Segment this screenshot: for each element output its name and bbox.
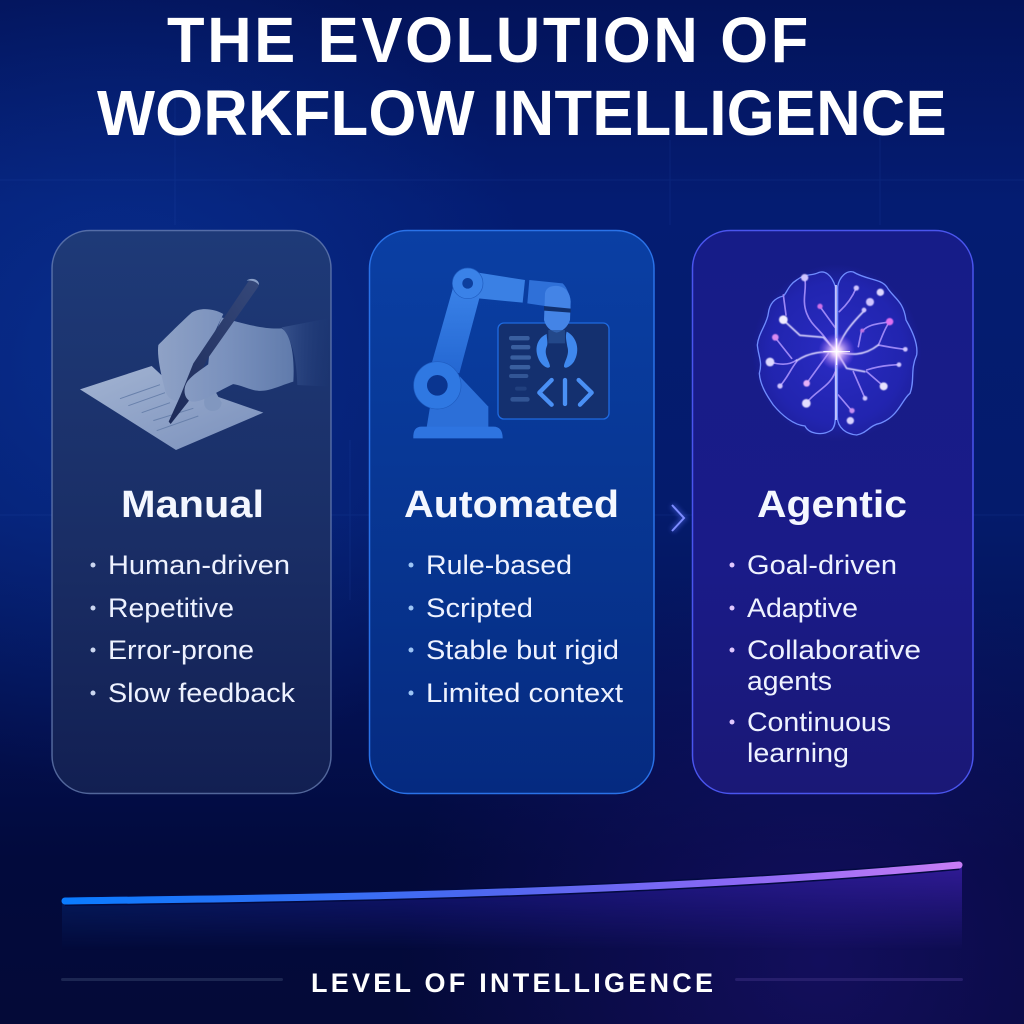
list: agentic bullets: Goal-driven xyxy=(747,550,897,580)
title: THE EVOLUTION OF xyxy=(167,5,808,76)
panel: manual xyxy=(52,230,331,794)
icon: hand writing on paper xyxy=(80,279,328,450)
panel: automated xyxy=(370,230,654,794)
list: agentic bullets: Adaptive xyxy=(747,593,858,623)
title xyxy=(97,5,947,149)
title: WORKFLOW INTELLIGENCE xyxy=(97,78,947,149)
list: agentic bullets: Collaborative xyxy=(747,635,921,665)
list: automated bullets: Limited context xyxy=(426,678,624,708)
list: agentic bullets: Continuous xyxy=(747,707,891,737)
list: manual bullets: Slow feedback xyxy=(108,678,296,708)
heading: Automated: Automated xyxy=(404,484,619,526)
list: manual bullets xyxy=(90,550,296,708)
axis label: level of intelligence xyxy=(61,968,963,998)
list: automated bullets xyxy=(408,550,624,708)
list: manual bullets: Repetitive xyxy=(108,593,234,623)
list: agentic bullets xyxy=(730,550,921,768)
arrow: automated to agentic xyxy=(672,505,684,531)
panel: agentic xyxy=(692,230,973,794)
list: agentic bullets: learning xyxy=(747,738,849,768)
list: automated bullets: Stable but rigid xyxy=(426,635,619,665)
list: manual bullets: Human-driven xyxy=(108,550,290,580)
heading: Manual: Manual xyxy=(121,484,264,526)
heading: Agentic: Agentic xyxy=(757,484,907,526)
list: agentic bullets: agents xyxy=(747,666,832,696)
icon: glowing brain xyxy=(752,264,922,441)
list: manual bullets: Error-prone xyxy=(108,635,254,665)
list: automated bullets: Scripted xyxy=(426,593,533,623)
list: automated bullets: Rule-based xyxy=(426,550,572,580)
icon: robot arm with code screen xyxy=(413,268,609,438)
chart: intelligence curve xyxy=(62,865,962,950)
axis label: level of intelligence: LEVEL OF INTELLIGENCE xyxy=(311,968,713,998)
